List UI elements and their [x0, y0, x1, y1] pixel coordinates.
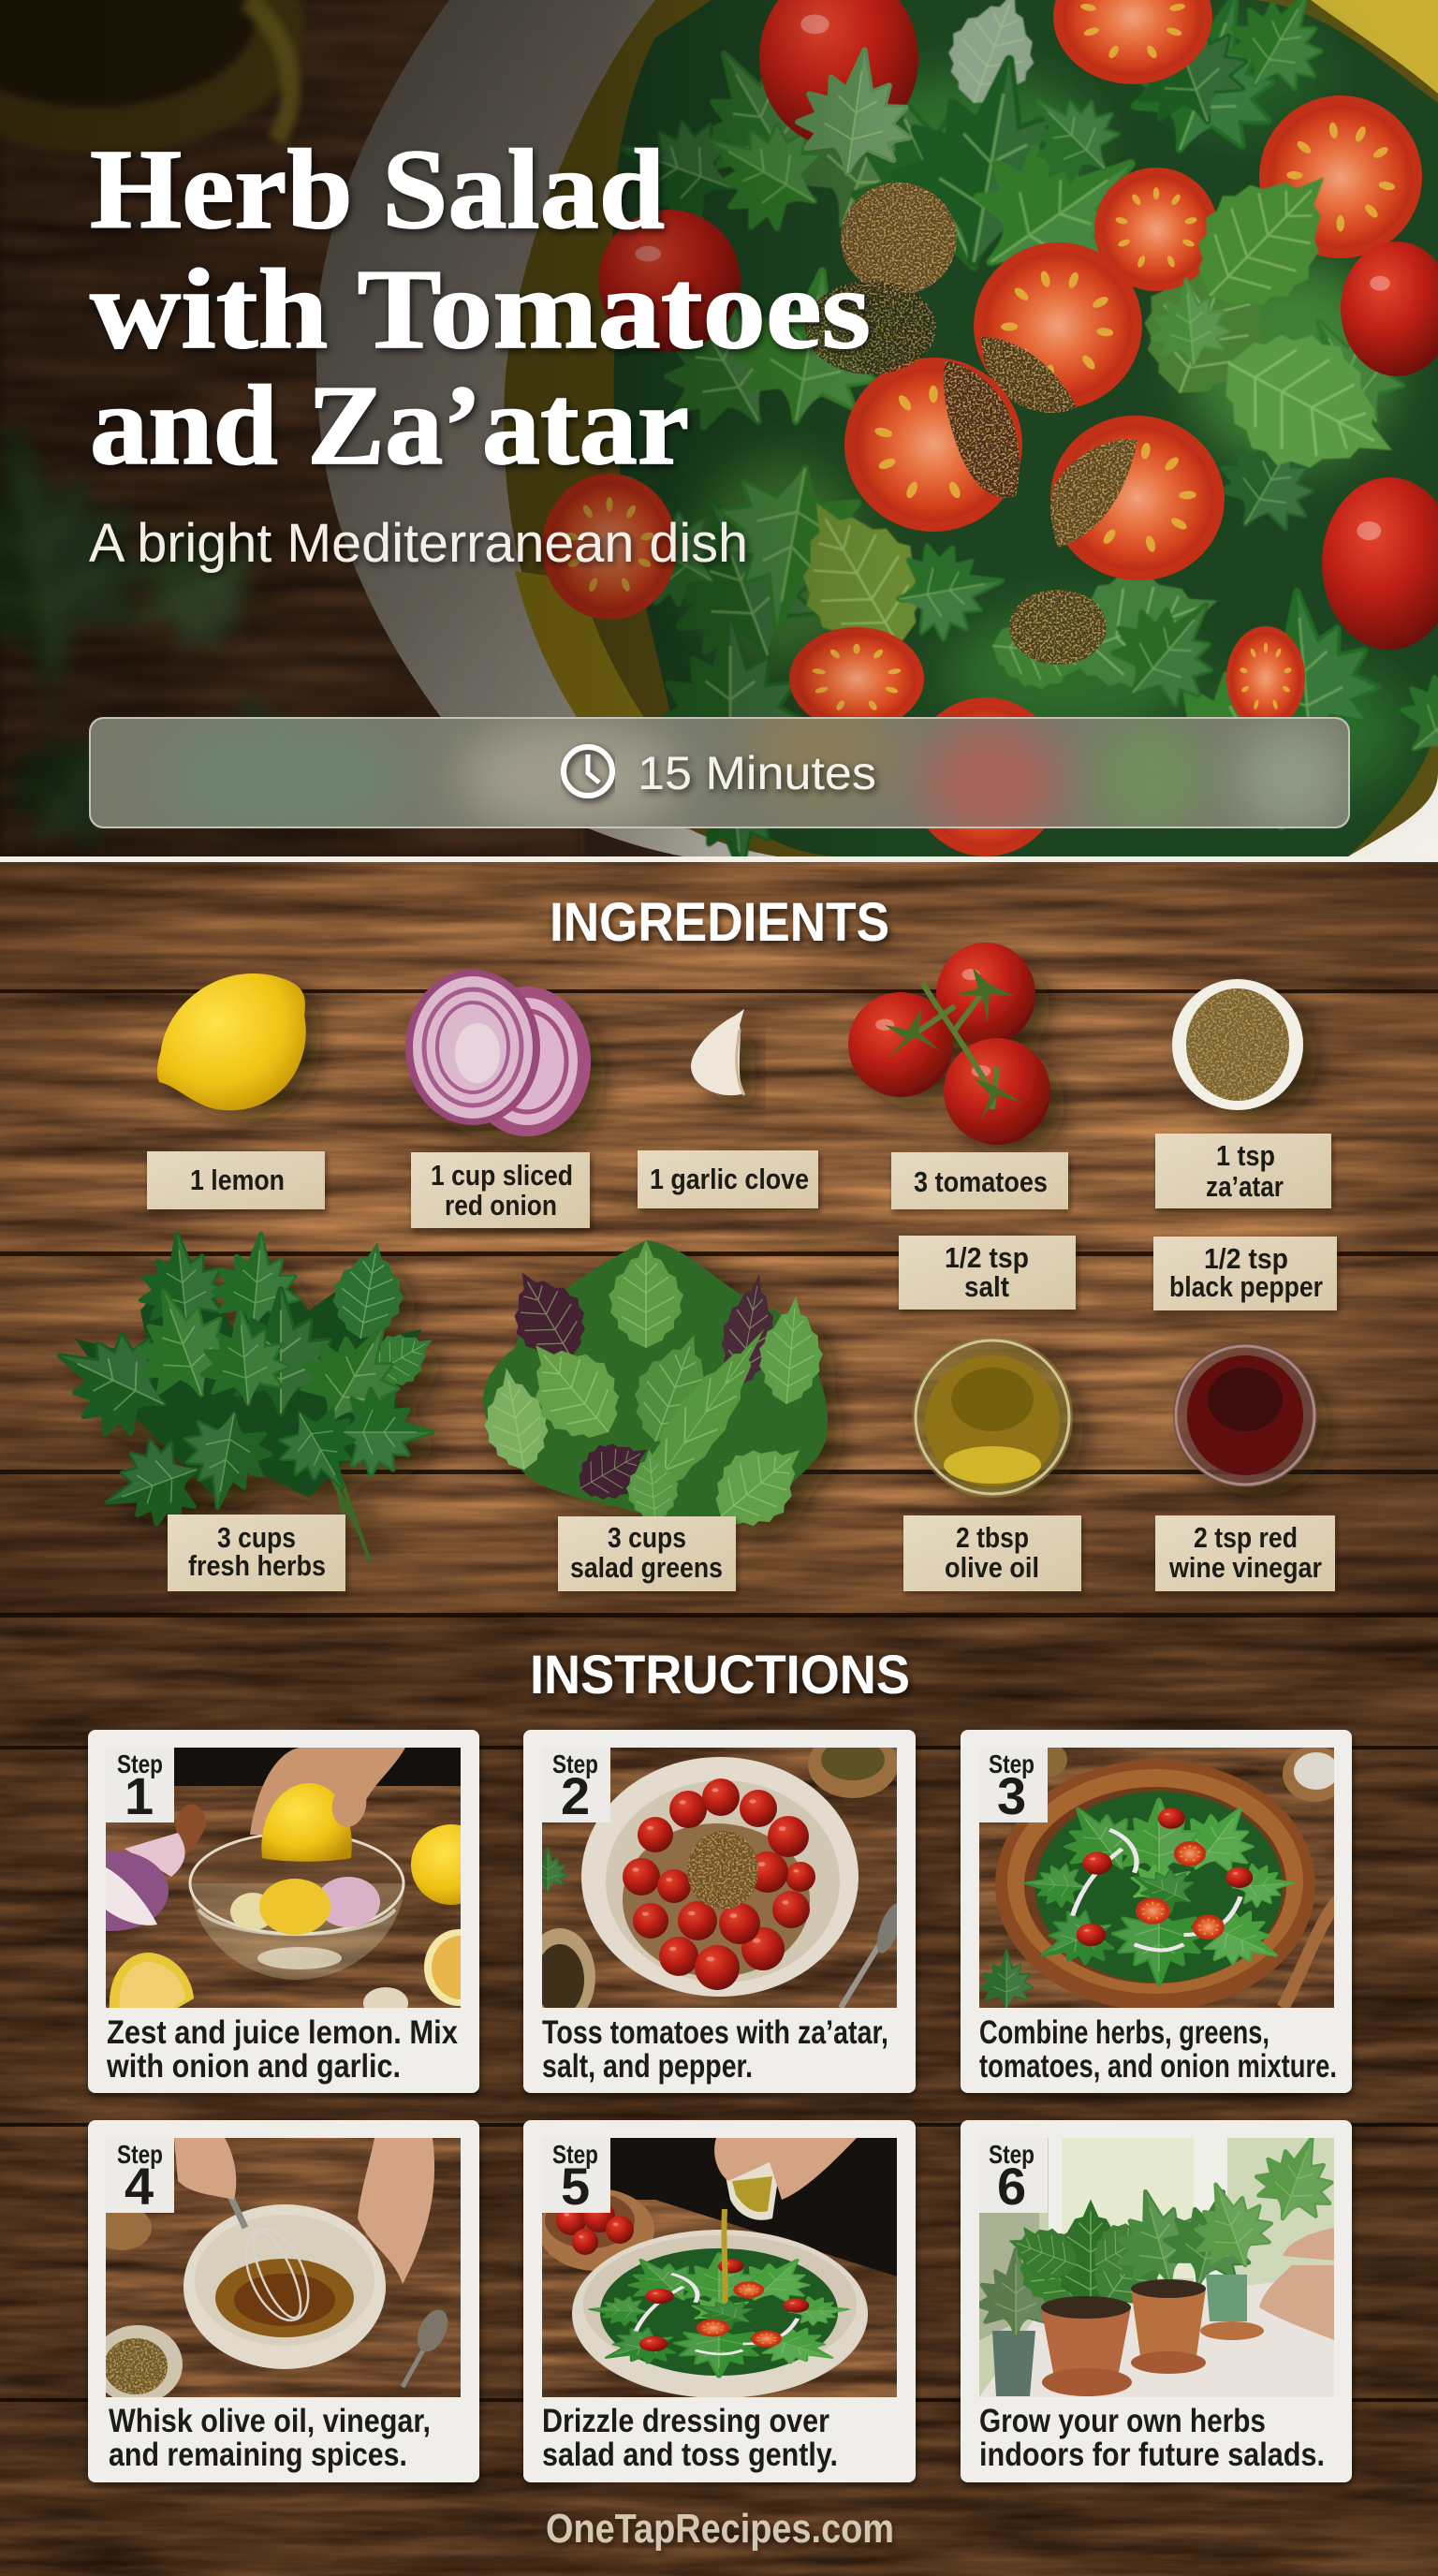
label: 3 cups salad greens: 3 cups: [608, 1521, 686, 1554]
icon: zaatar bowl: [1172, 979, 1303, 1110]
label: 2 tbsp olive oil: [903, 1515, 1081, 1591]
step badge: Step: [552, 2140, 598, 2169]
label: 1 lemon: 1 lemon: [190, 1164, 285, 1196]
label: 1/2 tsp black pepper: [1153, 1237, 1337, 1310]
step badge: Step: [117, 1749, 163, 1778]
photo: squeezing lemon: [56, 1748, 493, 2019]
step badge: Step: [552, 1749, 598, 1778]
step badge: [542, 2138, 610, 2216]
label: 3 tomatoes: 3 tomatoes: [914, 1165, 1048, 1198]
olive oil in bowl: [504, 0, 1438, 856]
step badge: 3: [997, 1766, 1026, 1825]
step badge: 1: [125, 1766, 154, 1825]
heading: ingredients: INGREDIENTS: [550, 892, 889, 953]
label: 3 cups fresh herbs: 3 cups: [217, 1521, 296, 1554]
label: 1 tsp zaatar: za’atar: [1206, 1170, 1284, 1203]
label: 3 tomatoes: [891, 1152, 1068, 1209]
footer website: OneTapRecipes.com: [546, 2506, 894, 2552]
step 4 card: [88, 2120, 479, 2482]
label: 1/2 tsp salt: salt: [964, 1270, 1009, 1303]
icon: olive oil jar: [0, 0, 304, 154]
icon: tomatoes on vine: [848, 943, 1050, 1145]
icon: fresh herbs bunch: [38, 1230, 446, 1561]
label: 2 tsp red wine vinegar: wine vinegar: [1168, 1551, 1322, 1584]
herb leaves: [597, 0, 1438, 877]
label: 3 cups salad greens: [558, 1516, 736, 1591]
title: and Za’atar: [90, 362, 689, 489]
icon: salad greens: [475, 1239, 828, 1545]
icon: clock: [564, 747, 612, 796]
step text: Zest and juice lemon. Mix: [107, 2014, 458, 2051]
step 5 card: [523, 2120, 916, 2482]
step text: indoors for future salads.: [979, 2437, 1325, 2473]
step text: Whisk olive oil, vinegar,: [109, 2403, 431, 2439]
step text: salt, and pepper.: [542, 2048, 753, 2085]
label: 3 cups fresh herbs: [168, 1515, 345, 1591]
title: with Tomatoes: [90, 246, 871, 373]
label: 1 tsp zaatar: 1 tsp: [1216, 1139, 1275, 1172]
label: 1 garlic clove: [638, 1150, 818, 1208]
step badge: [542, 1748, 610, 1825]
step 3 card: [961, 1730, 1352, 2093]
step text: Drizzle dressing over: [542, 2403, 829, 2439]
step text: and remaining spices.: [109, 2437, 407, 2473]
label: 1 cup sliced red onion: 1 cup sliced: [431, 1159, 573, 1192]
label: 2 tsp red wine vinegar: [1155, 1515, 1335, 1591]
label: 3 cups fresh herbs: fresh herbs: [188, 1549, 326, 1582]
label: 1/2 tsp black pepper: black pepper: [1169, 1270, 1323, 1303]
label: 2 tbsp olive oil: olive oil: [945, 1551, 1039, 1584]
label: 1 lemon: [147, 1151, 325, 1209]
title: [90, 126, 871, 489]
herbs blurred at left: [0, 425, 273, 843]
heading: instructions: INSTRUCTIONS: [530, 1645, 910, 1705]
icon: olive oil bowl: [912, 1337, 1073, 1498]
step badge: 5: [561, 2157, 590, 2216]
subtitle: A bright Mediterranean dish: [89, 513, 748, 574]
mint leaves on top: [1148, 136, 1424, 510]
divider: [0, 856, 1438, 862]
photo: indoor herbs: [977, 2125, 1348, 2397]
step text: Combine herbs, greens,: [979, 2014, 1269, 2051]
step text: [979, 2014, 1337, 2085]
step badge: [106, 1748, 174, 1825]
photo: tossing tomatoes: [524, 1731, 907, 2026]
label: 1/2 tsp salt: [899, 1236, 1076, 1310]
panel: time pill: [89, 693, 1350, 842]
panel: ingredients: [0, 862, 1438, 1615]
panel: hero photo: [0, 0, 1438, 877]
step 6 card: [961, 2120, 1352, 2482]
icon: red wine vinegar bowl: [1173, 1343, 1317, 1487]
step badge: [979, 2138, 1048, 2216]
tomato pieces: [542, 0, 1438, 856]
step text: tomatoes, and onion mixture.: [979, 2048, 1337, 2085]
step badge: Step: [989, 1749, 1034, 1778]
step badge: Step: [989, 2140, 1034, 2169]
label: 1/2 tsp black pepper: 1/2 tsp: [1204, 1242, 1288, 1275]
step 1 card: [56, 1730, 493, 2093]
photo: combined salad: [979, 1743, 1346, 2011]
label: 1 tsp zaatar: [1155, 1134, 1331, 1208]
step badge: 4: [125, 2157, 154, 2216]
label: 1 cup sliced red onion: red onion: [445, 1189, 557, 1222]
step text: [542, 2403, 838, 2473]
label: 1 garlic clove: 1 garlic clove: [650, 1163, 809, 1195]
label: 1 cup sliced red onion: [411, 1152, 590, 1228]
step text: Toss tomatoes with za’atar,: [542, 2014, 888, 2051]
photo: whisking dressing: [92, 2138, 461, 2404]
darkening for title legibility: [0, 0, 1438, 856]
icon: red onion: [405, 970, 591, 1136]
label: 2 tbsp olive oil: 2 tbsp: [956, 1521, 1029, 1554]
step text: salad and toss gently.: [542, 2437, 838, 2473]
step text: with onion and garlic.: [106, 2048, 401, 2085]
step 2 card: [523, 1730, 916, 2093]
time text: 15 Minutes: [638, 747, 876, 799]
title: Herb Salad: [90, 126, 665, 253]
label: 1/2 tsp salt: 1/2 tsp: [945, 1241, 1029, 1274]
step badge: [979, 1748, 1048, 1825]
zaatar-topped tomato halves: [805, 183, 1238, 665]
icon: garlic clove: [691, 1009, 744, 1095]
step text: [542, 2014, 888, 2085]
step badge: [106, 2138, 174, 2216]
step badge: 2: [561, 1766, 590, 1825]
step text: [979, 2403, 1325, 2473]
step text: [106, 2014, 458, 2085]
salad greens mass: [613, 0, 1438, 856]
photo: drizzling dressing: [538, 2138, 897, 2398]
step text: Grow your own herbs: [979, 2403, 1266, 2439]
icon: lemon: [157, 973, 306, 1110]
label: 3 cups salad greens: salad greens: [570, 1551, 723, 1584]
label: 2 tsp red wine vinegar: 2 tsp red: [1194, 1521, 1298, 1554]
step badge: Step: [117, 2140, 163, 2169]
panel: instructions background: [0, 1613, 1438, 2576]
step badge: 6: [997, 2157, 1026, 2216]
step text: [109, 2403, 431, 2473]
bowl rim: [316, 0, 1438, 856]
